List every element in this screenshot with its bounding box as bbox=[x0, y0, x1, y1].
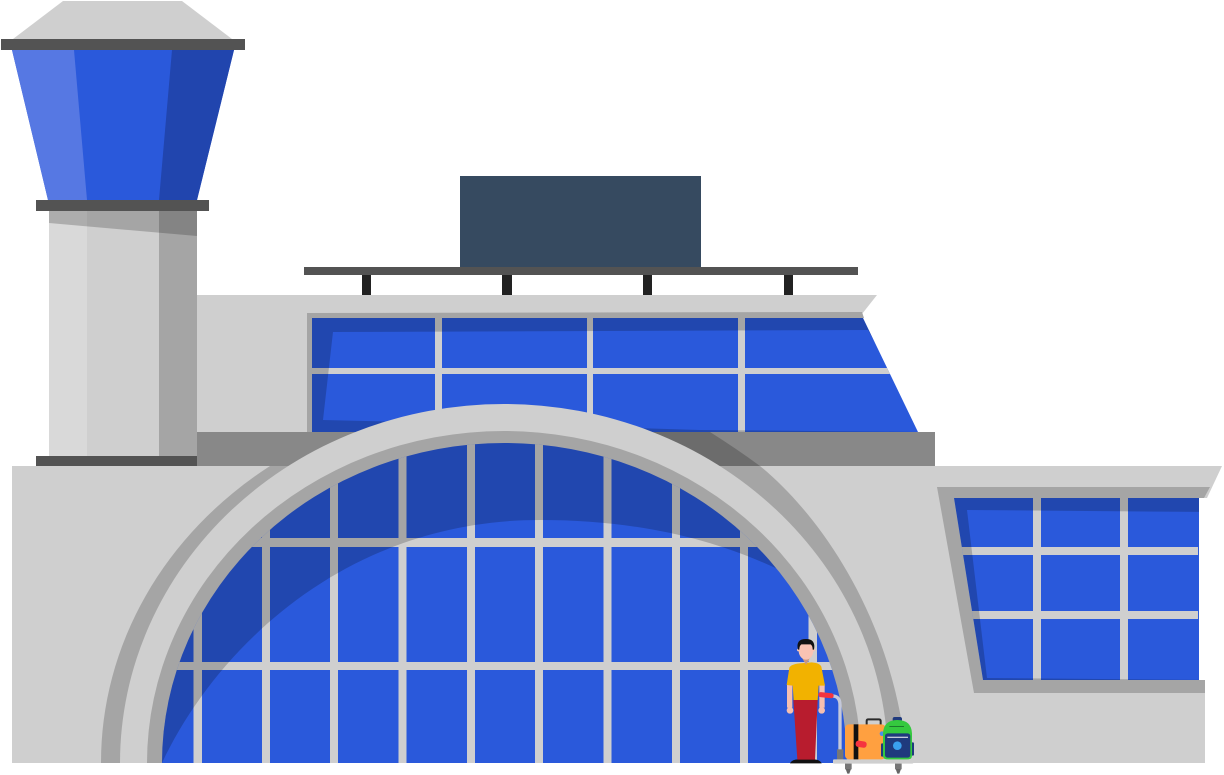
backpack bbox=[881, 717, 914, 759]
upper window frame bbox=[307, 312, 864, 432]
side window frame bbox=[937, 487, 1210, 693]
canopy supports bbox=[362, 275, 793, 295]
control tower bbox=[1, 1, 245, 466]
side window glass bbox=[954, 498, 1199, 680]
side window bbox=[937, 487, 1210, 693]
trolley grip bbox=[818, 692, 834, 698]
suitcase bbox=[845, 724, 886, 759]
trousers bbox=[793, 700, 818, 760]
shirt bbox=[787, 662, 825, 700]
upper window bbox=[312, 318, 918, 432]
rooftop canopy bar bbox=[304, 267, 858, 275]
tower lower ledge bbox=[36, 200, 209, 211]
arch shadow bbox=[101, 432, 907, 763]
tower base ledge bbox=[36, 456, 210, 466]
suitcase handle bbox=[867, 719, 881, 725]
left arm bbox=[787, 684, 793, 714]
upper storey wall bbox=[197, 295, 877, 432]
hair bbox=[797, 639, 814, 650]
tower shaft bbox=[49, 211, 197, 456]
trolley frame bbox=[828, 696, 840, 751]
trolley post bbox=[837, 749, 843, 760]
traveller bbox=[787, 639, 825, 763]
tower upper ledge bbox=[1, 39, 245, 50]
arch window shading bbox=[162, 443, 776, 763]
trolley deck bbox=[833, 759, 913, 764]
arch inner band bbox=[147, 431, 861, 763]
arch bbox=[120, 404, 888, 770]
right arm bbox=[818, 684, 825, 714]
arch window bbox=[150, 430, 860, 770]
arch window grid bbox=[176, 444, 832, 763]
neck bbox=[802, 658, 810, 665]
lower roof band bbox=[197, 432, 935, 466]
shoes bbox=[790, 759, 822, 763]
head bbox=[797, 642, 815, 660]
trolley wheels bbox=[845, 763, 902, 774]
rooftop sign panel bbox=[460, 176, 701, 267]
tower cab glass bbox=[12, 50, 234, 200]
upper terminal storey bbox=[197, 295, 935, 466]
rooftop sign structure bbox=[304, 176, 858, 295]
main terminal body bbox=[12, 466, 1222, 763]
arch outer band bbox=[120, 404, 888, 763]
tower roof cap bbox=[13, 1, 232, 39]
luggage trolley bbox=[818, 692, 914, 774]
